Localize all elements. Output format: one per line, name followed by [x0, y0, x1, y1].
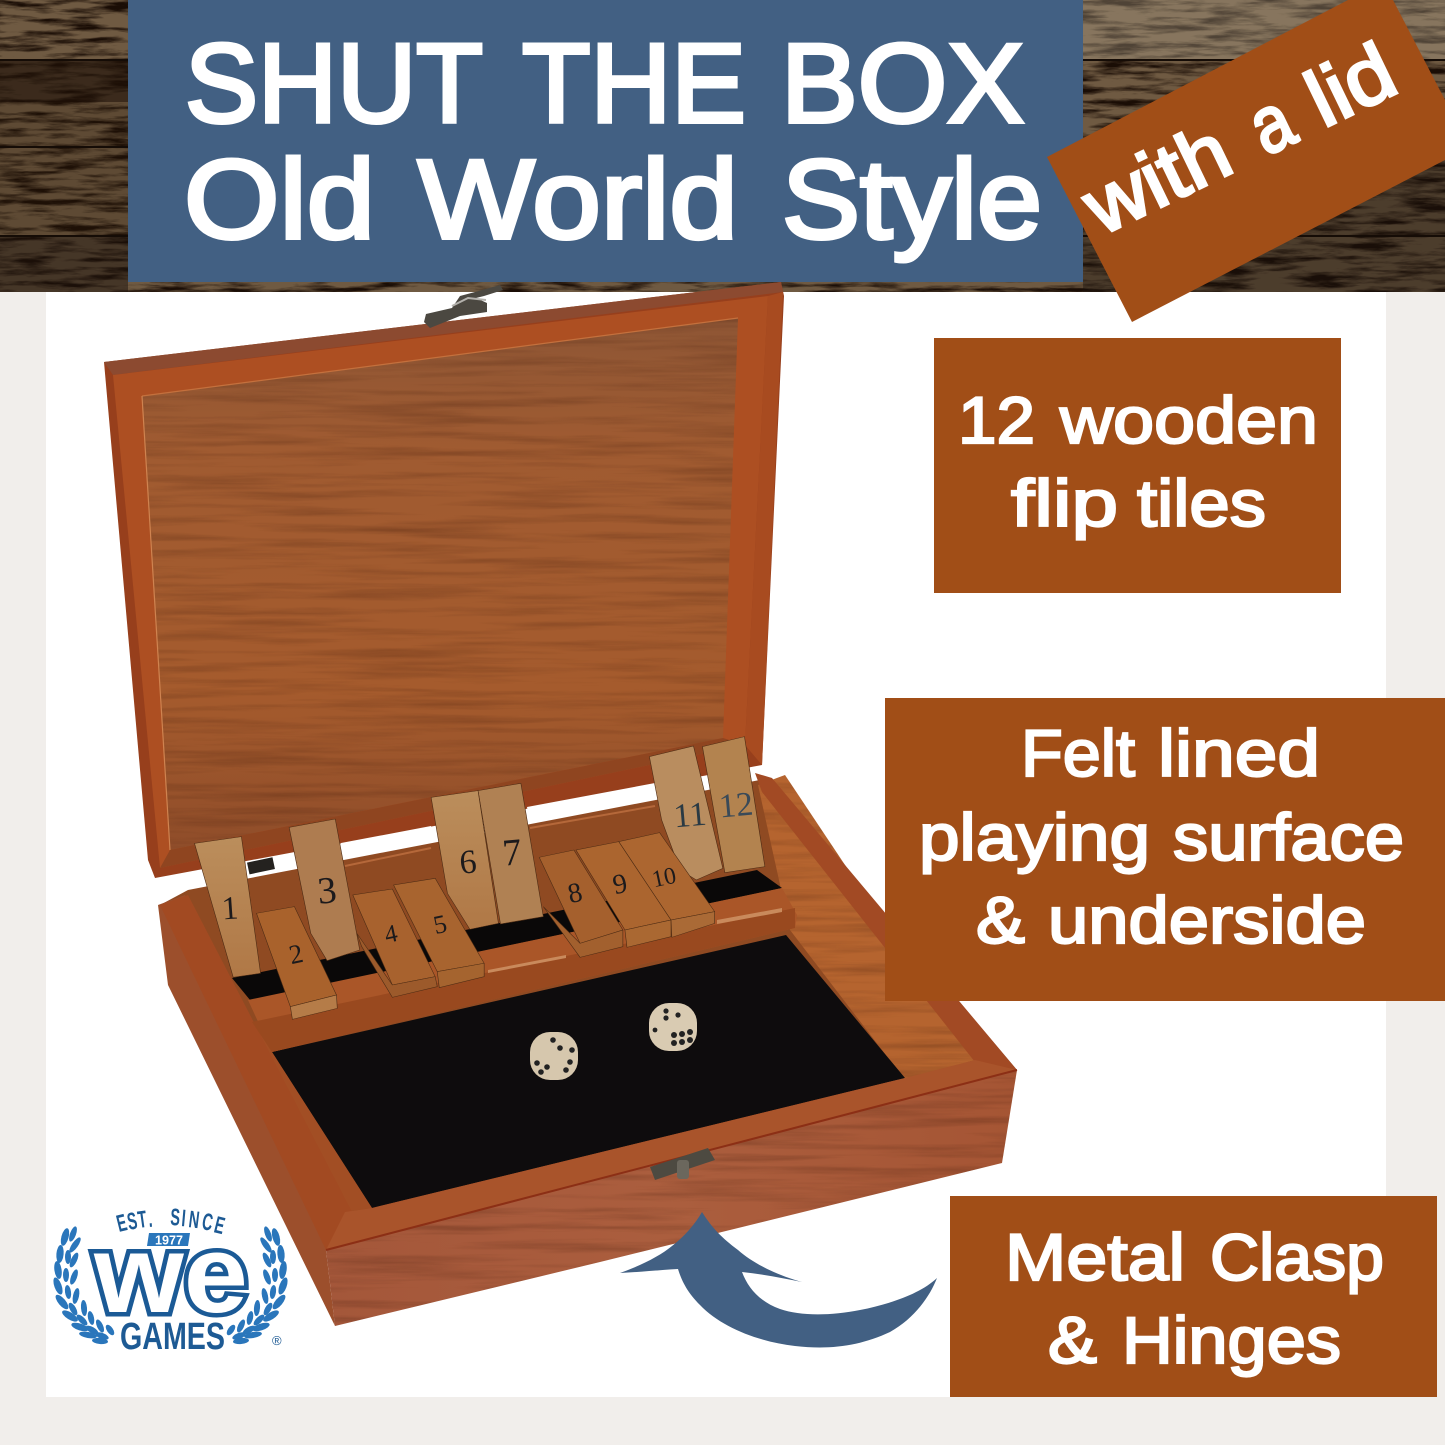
badge: with a lid: [1047, 0, 1445, 322]
title line 2: [184, 137, 1042, 262]
left die: [530, 1032, 578, 1080]
callout text: Clasp: [1210, 1220, 1384, 1294]
front face of box: [326, 1070, 1017, 1326]
title line 2: Style: [782, 137, 1042, 262]
box gaps: [250, 783, 658, 877]
callout text: Felt: [1021, 716, 1135, 790]
tile rail: [232, 870, 797, 1052]
box left outer side: [158, 895, 345, 1326]
left interior wall: [185, 898, 372, 1212]
tile numbers: 4: [382, 920, 401, 949]
product photo: open wooden box: [104, 282, 1017, 1326]
front clasp: [650, 1148, 715, 1180]
callout text: &: [1048, 1303, 1097, 1377]
back wall lip lines: [345, 806, 655, 866]
callout: 12 wooden flip tiles: [934, 338, 1341, 593]
laurel wreath right: [225, 1225, 289, 1345]
lid clasp: [424, 285, 503, 328]
title line 2: Old: [184, 137, 375, 262]
callout text: wooden: [1059, 383, 1318, 457]
tile numbers: 8: [565, 877, 585, 910]
flip tiles 1 to 12: [194, 737, 765, 1019]
tile numbers: 6: [458, 843, 478, 882]
est since text: S: [170, 1204, 181, 1232]
callout text: underside: [1048, 883, 1366, 957]
est since text: [114, 1204, 227, 1240]
WE wordmark: we: [93, 1213, 248, 1336]
tile 9: [576, 842, 671, 947]
box lid: [104, 282, 784, 878]
right rim: [755, 773, 1017, 1070]
callout text: 12: [958, 383, 1035, 457]
tile 2: [256, 907, 337, 1019]
right die: [649, 1003, 697, 1051]
callout text: surface: [1173, 800, 1404, 874]
est since text: S: [125, 1208, 140, 1236]
tile 5: [394, 878, 484, 988]
white content panel: [46, 292, 1386, 1397]
est since text: T: [136, 1206, 149, 1234]
est since text: .: [147, 1206, 154, 1233]
tile numbers: [221, 786, 755, 970]
title line 1: BOX: [781, 21, 1024, 146]
est since text: C: [200, 1209, 215, 1237]
right interior wall: [758, 775, 975, 1080]
callout: felt lined: [885, 698, 1445, 1001]
front rim: [326, 1060, 1017, 1250]
laurel wreath left: [52, 1225, 116, 1345]
tile 11: [649, 746, 723, 880]
callout text: playing: [919, 800, 1150, 874]
title line 1: [185, 21, 1024, 146]
callout text: [919, 716, 1404, 957]
WE Games logo: [52, 1204, 289, 1358]
callout text: Metal: [1005, 1220, 1185, 1294]
box base backing: [160, 778, 1017, 1250]
title line 1: SHUT: [185, 21, 483, 146]
tile numbers: 11: [672, 796, 708, 835]
title line 2: World: [418, 137, 738, 262]
tile numbers: 12: [717, 786, 755, 825]
est since text: I: [180, 1205, 187, 1232]
callout text: [1005, 1220, 1384, 1377]
tile numbers: 5: [431, 909, 449, 940]
callout text: flip: [1011, 466, 1118, 540]
est since text: N: [187, 1207, 201, 1234]
callout text: lined: [1158, 716, 1320, 790]
tile numbers: 10: [650, 863, 679, 893]
tile 4: [353, 889, 437, 997]
tile numbers: 3: [316, 869, 338, 913]
callout text: [958, 383, 1318, 540]
badge text: lid: [1292, 26, 1409, 144]
tile 10: [619, 833, 715, 937]
badge text: with: [1069, 105, 1244, 252]
games text: GAMES: [120, 1316, 225, 1358]
tile 12: [702, 737, 765, 873]
tile 7: [478, 783, 543, 924]
registered mark: ®: [272, 1333, 282, 1348]
callout text: Hinges: [1122, 1303, 1341, 1377]
callout: metal clasp: [950, 1196, 1437, 1397]
wood plank header band: [0, 0, 1445, 292]
hinge: [247, 857, 275, 874]
felt playing surface: [272, 935, 905, 1208]
tile 1: [194, 837, 261, 977]
tile 6: [431, 791, 498, 929]
title banner: [128, 0, 1083, 282]
badge text: a: [1234, 75, 1308, 172]
tile numbers: 1: [221, 890, 240, 928]
1977 banner: 1977: [155, 1232, 183, 1248]
1977 banner: [147, 1232, 190, 1248]
badge text: [1069, 26, 1409, 252]
tile numbers: 9: [610, 868, 630, 901]
title line 1: THE: [522, 21, 746, 146]
tile numbers: 2: [286, 938, 306, 970]
callout text: &: [976, 883, 1025, 957]
est since text: E: [212, 1212, 227, 1240]
est since text: E: [114, 1210, 130, 1238]
tile 3: [289, 819, 360, 961]
tile numbers: 7: [501, 831, 523, 875]
callout text: tiles: [1137, 466, 1266, 540]
arrow pointing to clasp: [620, 1212, 937, 1347]
tile 8: [539, 850, 623, 957]
